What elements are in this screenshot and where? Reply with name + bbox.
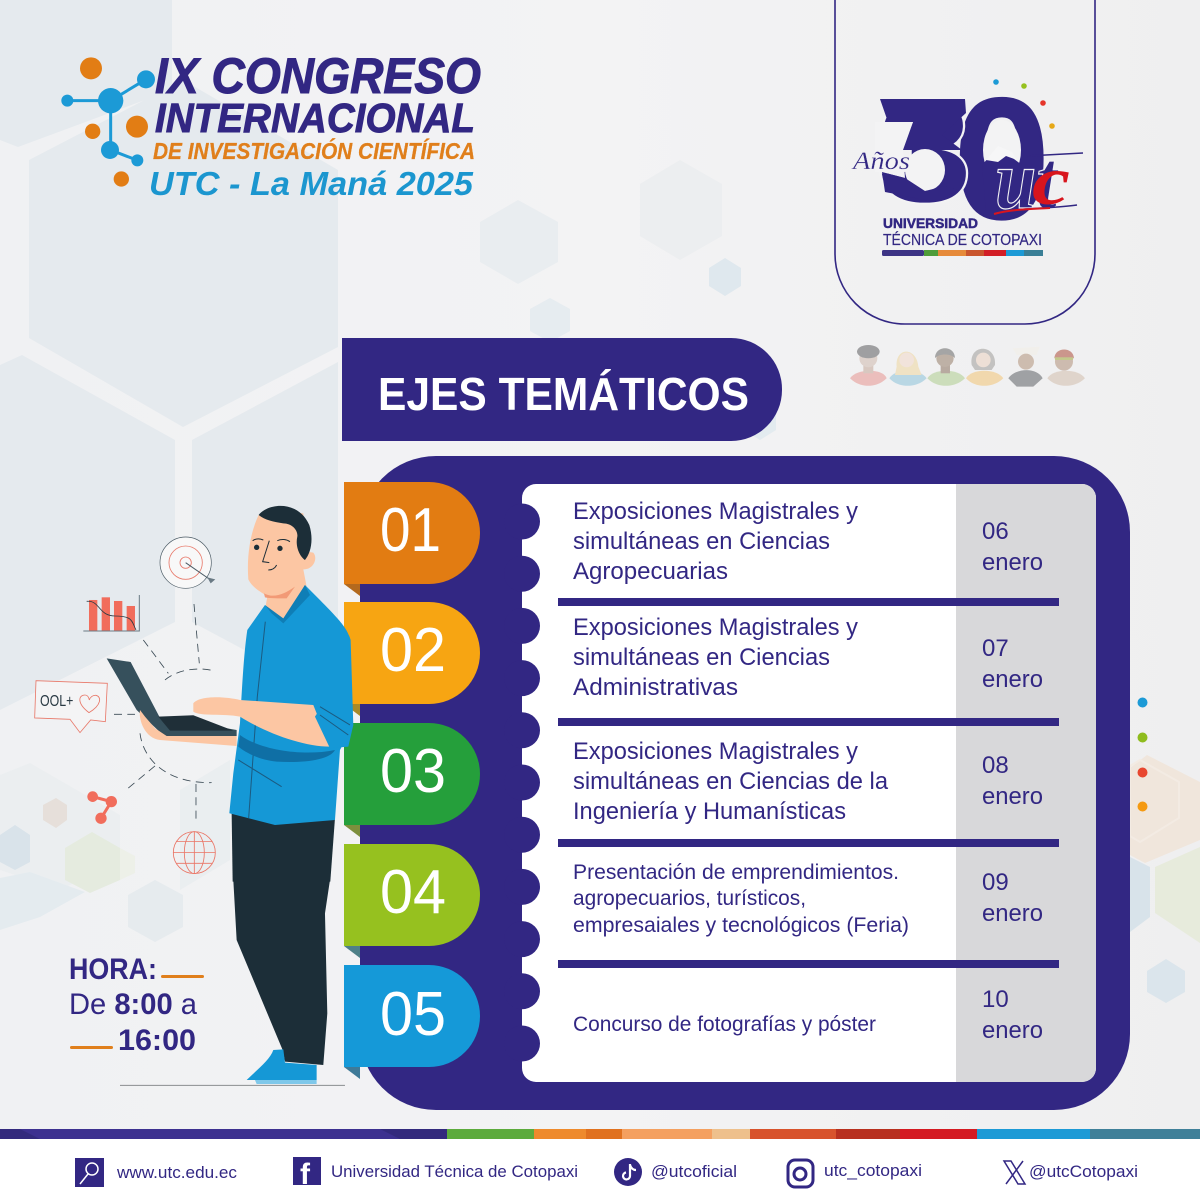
date 2: 07 bbox=[982, 635, 1009, 662]
tab 04 bbox=[344, 844, 480, 958]
heading: Ejes Temáticos: EJES TEMÁTICOS bbox=[378, 368, 749, 420]
footer: X bbox=[1004, 1161, 1138, 1184]
footer: instagram: utc_cotopaxi bbox=[824, 1161, 922, 1180]
row 5 text: Concurso de fotografías y póster bbox=[573, 1013, 876, 1036]
row 4 text: agropecuarios, turísticos, bbox=[573, 887, 806, 910]
date 3 bbox=[982, 752, 1043, 810]
logo card: 30 años UTC bbox=[835, 0, 1095, 324]
illustration: man with laptop bbox=[107, 506, 353, 1085]
date 4: 09 bbox=[982, 869, 1009, 896]
schedule block: De 8:00 a bbox=[69, 988, 197, 1021]
main navy panel bbox=[360, 456, 1130, 1110]
tab 03 bbox=[344, 723, 480, 837]
title: IX Congreso Internacional: DE INVESTIGACIÓN CIENTÍFICA bbox=[153, 137, 475, 164]
footer: facebook: Universidad Técnica de Cotopaxi bbox=[331, 1162, 578, 1181]
decorative dots bbox=[1138, 698, 1148, 812]
heading: Ejes Temáticos bbox=[342, 338, 782, 441]
man shirt bbox=[229, 585, 353, 825]
row 4 text: empresaiales y tecnológicos (Feria) bbox=[573, 914, 909, 937]
date 4 bbox=[982, 869, 1043, 927]
date 1 bbox=[982, 518, 1043, 576]
row 1 text: Agropecuarias bbox=[573, 558, 728, 585]
date 5 bbox=[982, 986, 1043, 1044]
schedule block bbox=[69, 953, 204, 1057]
date 3: 08 bbox=[982, 752, 1009, 779]
footer: tiktok: @utcoficial bbox=[651, 1162, 737, 1181]
logo: IX Congreso network icon bbox=[61, 57, 155, 187]
footer: website bbox=[75, 1158, 237, 1187]
white table card bbox=[522, 484, 1096, 1082]
tab 05: 05 bbox=[380, 980, 446, 1049]
footer: instagram bbox=[788, 1160, 922, 1187]
date 2: enero bbox=[982, 666, 1043, 693]
logo numerals 30: 3 bbox=[878, 69, 972, 232]
row 4 text bbox=[573, 861, 909, 937]
title: IX Congreso Internacional: UTC - La Maná 2025 bbox=[149, 165, 474, 202]
icon: like bubble bbox=[35, 681, 107, 733]
icon: share nodes bbox=[87, 791, 117, 824]
row 2 text bbox=[573, 614, 858, 701]
row 1 text: simultáneas en Ciencias bbox=[573, 528, 830, 555]
tab 03: 03 bbox=[380, 737, 446, 806]
footer: facebook bbox=[293, 1157, 578, 1191]
man shoes bbox=[247, 1049, 317, 1080]
date 5: enero bbox=[982, 1017, 1043, 1044]
man head bbox=[248, 510, 315, 620]
logo card: 30 años UTC: c bbox=[1032, 143, 1070, 220]
icon: target bbox=[160, 537, 215, 588]
schedule block: HORA: bbox=[69, 953, 157, 986]
row 3 text: Exposiciones Magistrales y bbox=[573, 738, 858, 765]
row 3 text: simultáneas en Ciencias de la bbox=[573, 768, 889, 795]
footer: X: @utcCotopaxi bbox=[1029, 1162, 1138, 1181]
ground line bbox=[120, 1084, 345, 1087]
row 1 text bbox=[573, 498, 858, 585]
date 1: 06 bbox=[982, 518, 1009, 545]
title: IX Congreso Internacional bbox=[149, 48, 481, 202]
tab 05 bbox=[344, 965, 480, 1079]
row 2 text: Exposiciones Magistrales y bbox=[573, 614, 858, 641]
icon: bar chart bbox=[83, 595, 139, 631]
dashed connectors bbox=[114, 604, 213, 820]
row 2 text: simultáneas en Ciencias bbox=[573, 644, 830, 671]
date 4: enero bbox=[982, 900, 1043, 927]
tab 04: 04 bbox=[380, 858, 446, 927]
logo card: 30 años UTC: UNIVERSIDAD bbox=[883, 215, 978, 231]
man trousers upper bbox=[232, 813, 335, 882]
icon: like bubble: OOL+ bbox=[40, 693, 73, 710]
row 3 text bbox=[573, 738, 889, 825]
man trousers lower bbox=[233, 880, 330, 1065]
title: IX Congreso Internacional: IX CONGRESO bbox=[155, 48, 481, 104]
tab 01: 01 bbox=[380, 496, 441, 565]
schedule block: 16:00 bbox=[118, 1024, 196, 1057]
row 2 text: Administrativas bbox=[573, 674, 738, 701]
footer band bbox=[0, 1129, 1200, 1200]
logo numerals 30: 0 bbox=[954, 63, 1050, 255]
row 4 text: Presentación de emprendimientos. bbox=[573, 861, 899, 884]
date 5: 10 bbox=[982, 986, 1009, 1013]
avatars row bbox=[850, 345, 1085, 387]
footer: tiktok bbox=[614, 1158, 737, 1186]
logo numerals 30 bbox=[875, 63, 1050, 255]
title: IX Congreso Internacional: INTERNACIONAL bbox=[155, 95, 475, 141]
logo card: 30 años UTC: Años bbox=[851, 148, 910, 175]
row 3 text: Ingeniería y Humanísticas bbox=[573, 798, 846, 825]
man arms and hands bbox=[140, 710, 237, 746]
date 1: enero bbox=[982, 549, 1043, 576]
tab 01 bbox=[344, 482, 480, 596]
date 3: enero bbox=[982, 783, 1043, 810]
tab 02: 02 bbox=[380, 616, 446, 685]
logo card: 30 años UTC: ut bbox=[995, 134, 1059, 227]
laptop bbox=[107, 658, 237, 736]
logo card: 30 años UTC: TÉCNICA DE COTOPAXI bbox=[883, 232, 1042, 249]
footer: facebook: f bbox=[300, 1158, 311, 1191]
date 2 bbox=[982, 635, 1043, 693]
icon: globe bbox=[173, 832, 215, 874]
row 1 text: Exposiciones Magistrales y bbox=[573, 498, 858, 525]
tab 02 bbox=[344, 602, 480, 716]
footer: website: www.utc.edu.ec bbox=[116, 1163, 237, 1182]
